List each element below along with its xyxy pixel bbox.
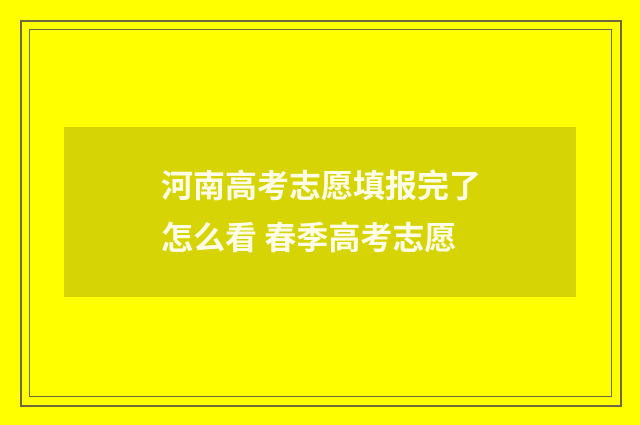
title line 1: 河南高考志愿填报完了 [161, 168, 481, 204]
panel: title banner [64, 127, 576, 297]
inner border frame [29, 29, 612, 397]
title line 2: 怎么看 春季高考志愿 [161, 220, 456, 256]
